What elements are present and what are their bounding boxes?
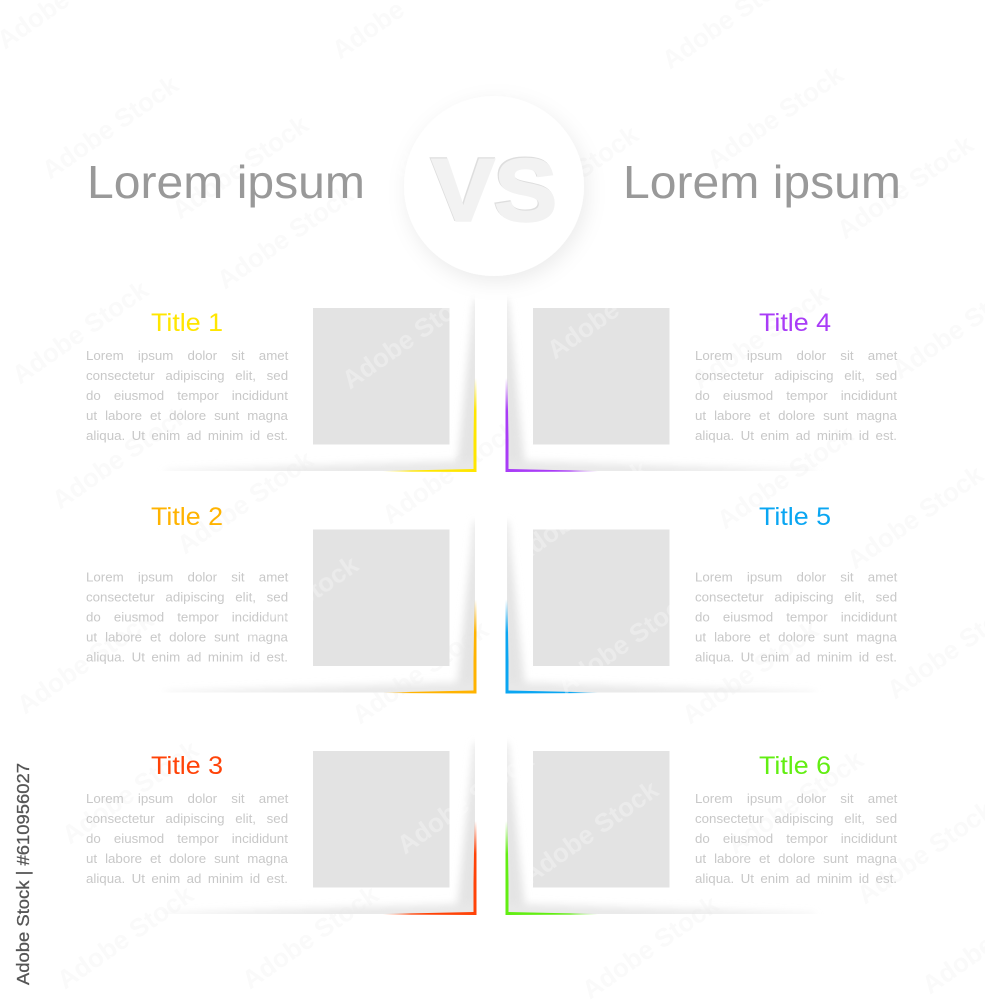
heading: right comparison title: Lorem ipsum: [623, 156, 901, 208]
text block: item 4: consectetur adipiscing elit, sed: [695, 368, 897, 383]
image placeholder: item 3: [313, 751, 450, 888]
image placeholder: item 2: [313, 530, 450, 666]
text block: item 6: aliqua. Ut enim ad minim id est.: [695, 871, 897, 886]
panel: item 6: [502, 743, 898, 923]
text block: item 5: consectetur adipiscing elit, sed: [695, 590, 897, 604]
panel: item 1: [86, 300, 480, 480]
title: item 3: Title 3: [151, 752, 223, 780]
text block: item 5: ut labore et dolore sunt magna: [695, 630, 897, 644]
corner accent: item 1: [165, 300, 480, 480]
text block: item 3: [86, 791, 289, 886]
watermark: stock agency pattern: Adobe Stock: [211, 179, 359, 295]
title: item 1: Title 1: [151, 309, 223, 337]
icon: VS badge: VS: [432, 140, 557, 240]
title: item 4: Title 4: [759, 309, 831, 337]
image placeholder: item 5: [533, 530, 670, 666]
watermark: overlay across placeholders: Adobe Stock: [376, 74, 524, 190]
text block: item 2: Lorem ipsum dolor sit amet: [86, 570, 289, 584]
text block: item 1: do eiusmod tempor incididunt: [86, 388, 288, 403]
text block: item 4: [695, 348, 898, 443]
watermark: stock agency pattern: Adobe Stock: [56, 734, 204, 850]
text block: item 3: Lorem ipsum dolor sit amet: [86, 791, 289, 806]
watermark: stock agency pattern: Adobe Stock: [676, 614, 824, 730]
text block: item 3: aliqua. Ut enim ad minim id est.: [86, 871, 288, 886]
text block: item 6: do eiusmod tempor incididunt: [695, 831, 897, 846]
text block: item 2: [86, 570, 289, 664]
image placeholder: item 6: [533, 751, 670, 888]
text block: item 4: do eiusmod tempor incididunt: [695, 388, 897, 403]
panel: item 4: [502, 300, 898, 480]
title: item 6: Title 6: [759, 752, 831, 780]
text block: item 5: [695, 570, 898, 664]
watermark: stock agency pattern: Adobe Stock: [496, 119, 644, 235]
watermark: stock agency pattern: Adobe Stock: [46, 399, 194, 515]
text block: item 5: Lorem ipsum dolor sit amet: [695, 570, 898, 584]
watermark: overlay across placeholders: Adobe Stock: [551, 584, 699, 700]
panel: item 3: [86, 743, 480, 923]
text block: item 1: [86, 348, 289, 443]
watermark: overlay across placeholders: Adobe Stock: [391, 744, 539, 860]
text block: item 6: [695, 791, 898, 886]
watermark: stock agency pattern: Adobe Stock: [166, 109, 314, 225]
watermark: overlay across placeholders: Adobe Stock: [541, 249, 689, 365]
text block: item 4: Lorem ipsum dolor sit amet: [695, 348, 898, 363]
watermark: stock agency pattern: Adobe Stock: [721, 744, 869, 860]
text block: item 4: aliqua. Ut enim ad minim id est.: [695, 428, 897, 443]
watermark: stock agency pattern: Adobe Stock: [236, 879, 384, 995]
text block: item 1: ut labore et dolore sunt magna: [86, 408, 288, 423]
watermark: stock agency pattern: Adobe Stock: [701, 59, 849, 175]
corner accent: item 4: [502, 300, 815, 480]
panel: item 5: [502, 503, 898, 702]
text block: item 6: ut labore et dolore sunt magna: [695, 851, 897, 866]
corner accent: item 6: [502, 743, 815, 923]
watermark: stock agency pattern: Adobe Stock: [171, 444, 319, 560]
text block: item 3: consectetur adipiscing elit, sed: [86, 811, 288, 826]
text block: item 1: aliqua. Ut enim ad minim id est.: [86, 428, 288, 443]
text block: item 6: consectetur adipiscing elit, sed: [695, 811, 897, 826]
text block: item 1: Lorem ipsum dolor sit amet: [86, 348, 289, 363]
watermark: stock agency pattern: Adobe Stock: [376, 414, 524, 530]
watermark: overlay across placeholders: Adobe Stock: [516, 774, 664, 890]
text block: item 2: consectetur adipiscing elit, sed: [86, 590, 288, 604]
corner accent: item 3: [165, 743, 480, 923]
image placeholder: item 4: [533, 308, 670, 444]
watermark: stock agency pattern: Adobe Stock: [6, 274, 154, 390]
text block: item 2: do eiusmod tempor incididunt: [86, 610, 288, 624]
watermark: stock agency pattern: Adobe Stock: [11, 604, 159, 720]
text block: item 4: ut labore et dolore sunt magna: [695, 408, 897, 423]
image credit: Adobe Stock number: Adobe Stock | #610956027: [13, 763, 33, 985]
watermark: overlay across placeholders: Adobe Stock: [216, 549, 364, 665]
watermark: overlay across placeholders: [216, 74, 699, 890]
watermark: stock agency pattern: Adobe Stock: [346, 614, 494, 730]
text block: item 2: ut labore et dolore sunt magna: [86, 630, 288, 644]
heading: left comparison title: Lorem ipsum: [87, 156, 365, 208]
text block: item 3: do eiusmod tempor incididunt: [86, 831, 288, 846]
watermark: stock agency pattern: Adobe Stock: [841, 459, 985, 575]
watermark: stock agency pattern: Adobe Stock: [711, 419, 859, 535]
watermark: overlay across placeholders: Adobe Stock: [506, 454, 654, 570]
watermark: stock agency pattern: Adobe Stock: [51, 879, 199, 995]
text block: item 2: aliqua. Ut enim ad minim id est.: [86, 650, 288, 664]
title: item 5: Title 5: [759, 503, 831, 531]
watermark: stock agency pattern: Adobe Stock: [36, 69, 184, 185]
icon: VS badge: [404, 96, 584, 276]
watermark: stock agency pattern: Adobe Stock: [831, 129, 979, 245]
text block: item 3: ut labore et dolore sunt magna: [86, 851, 288, 866]
watermark: overlay across placeholders: Adobe Stock: [336, 279, 484, 395]
text block: item 5: do eiusmod tempor incididunt: [695, 610, 897, 624]
watermark: stock agency pattern: Adobe Stock: [686, 279, 834, 395]
text block: item 5: aliqua. Ut enim ad minim id est.: [695, 650, 897, 664]
corner accent: item 2: [165, 522, 480, 702]
image placeholder: item 1: [313, 308, 450, 444]
title: item 2: Title 2: [151, 503, 223, 531]
panel: item 2: [86, 503, 480, 702]
text block: item 6: Lorem ipsum dolor sit amet: [695, 791, 898, 806]
text block: item 1: consectetur adipiscing elit, sed: [86, 368, 288, 383]
icon: VS badge: VS: [431, 140, 556, 238]
corner accent: item 5: [502, 522, 815, 702]
